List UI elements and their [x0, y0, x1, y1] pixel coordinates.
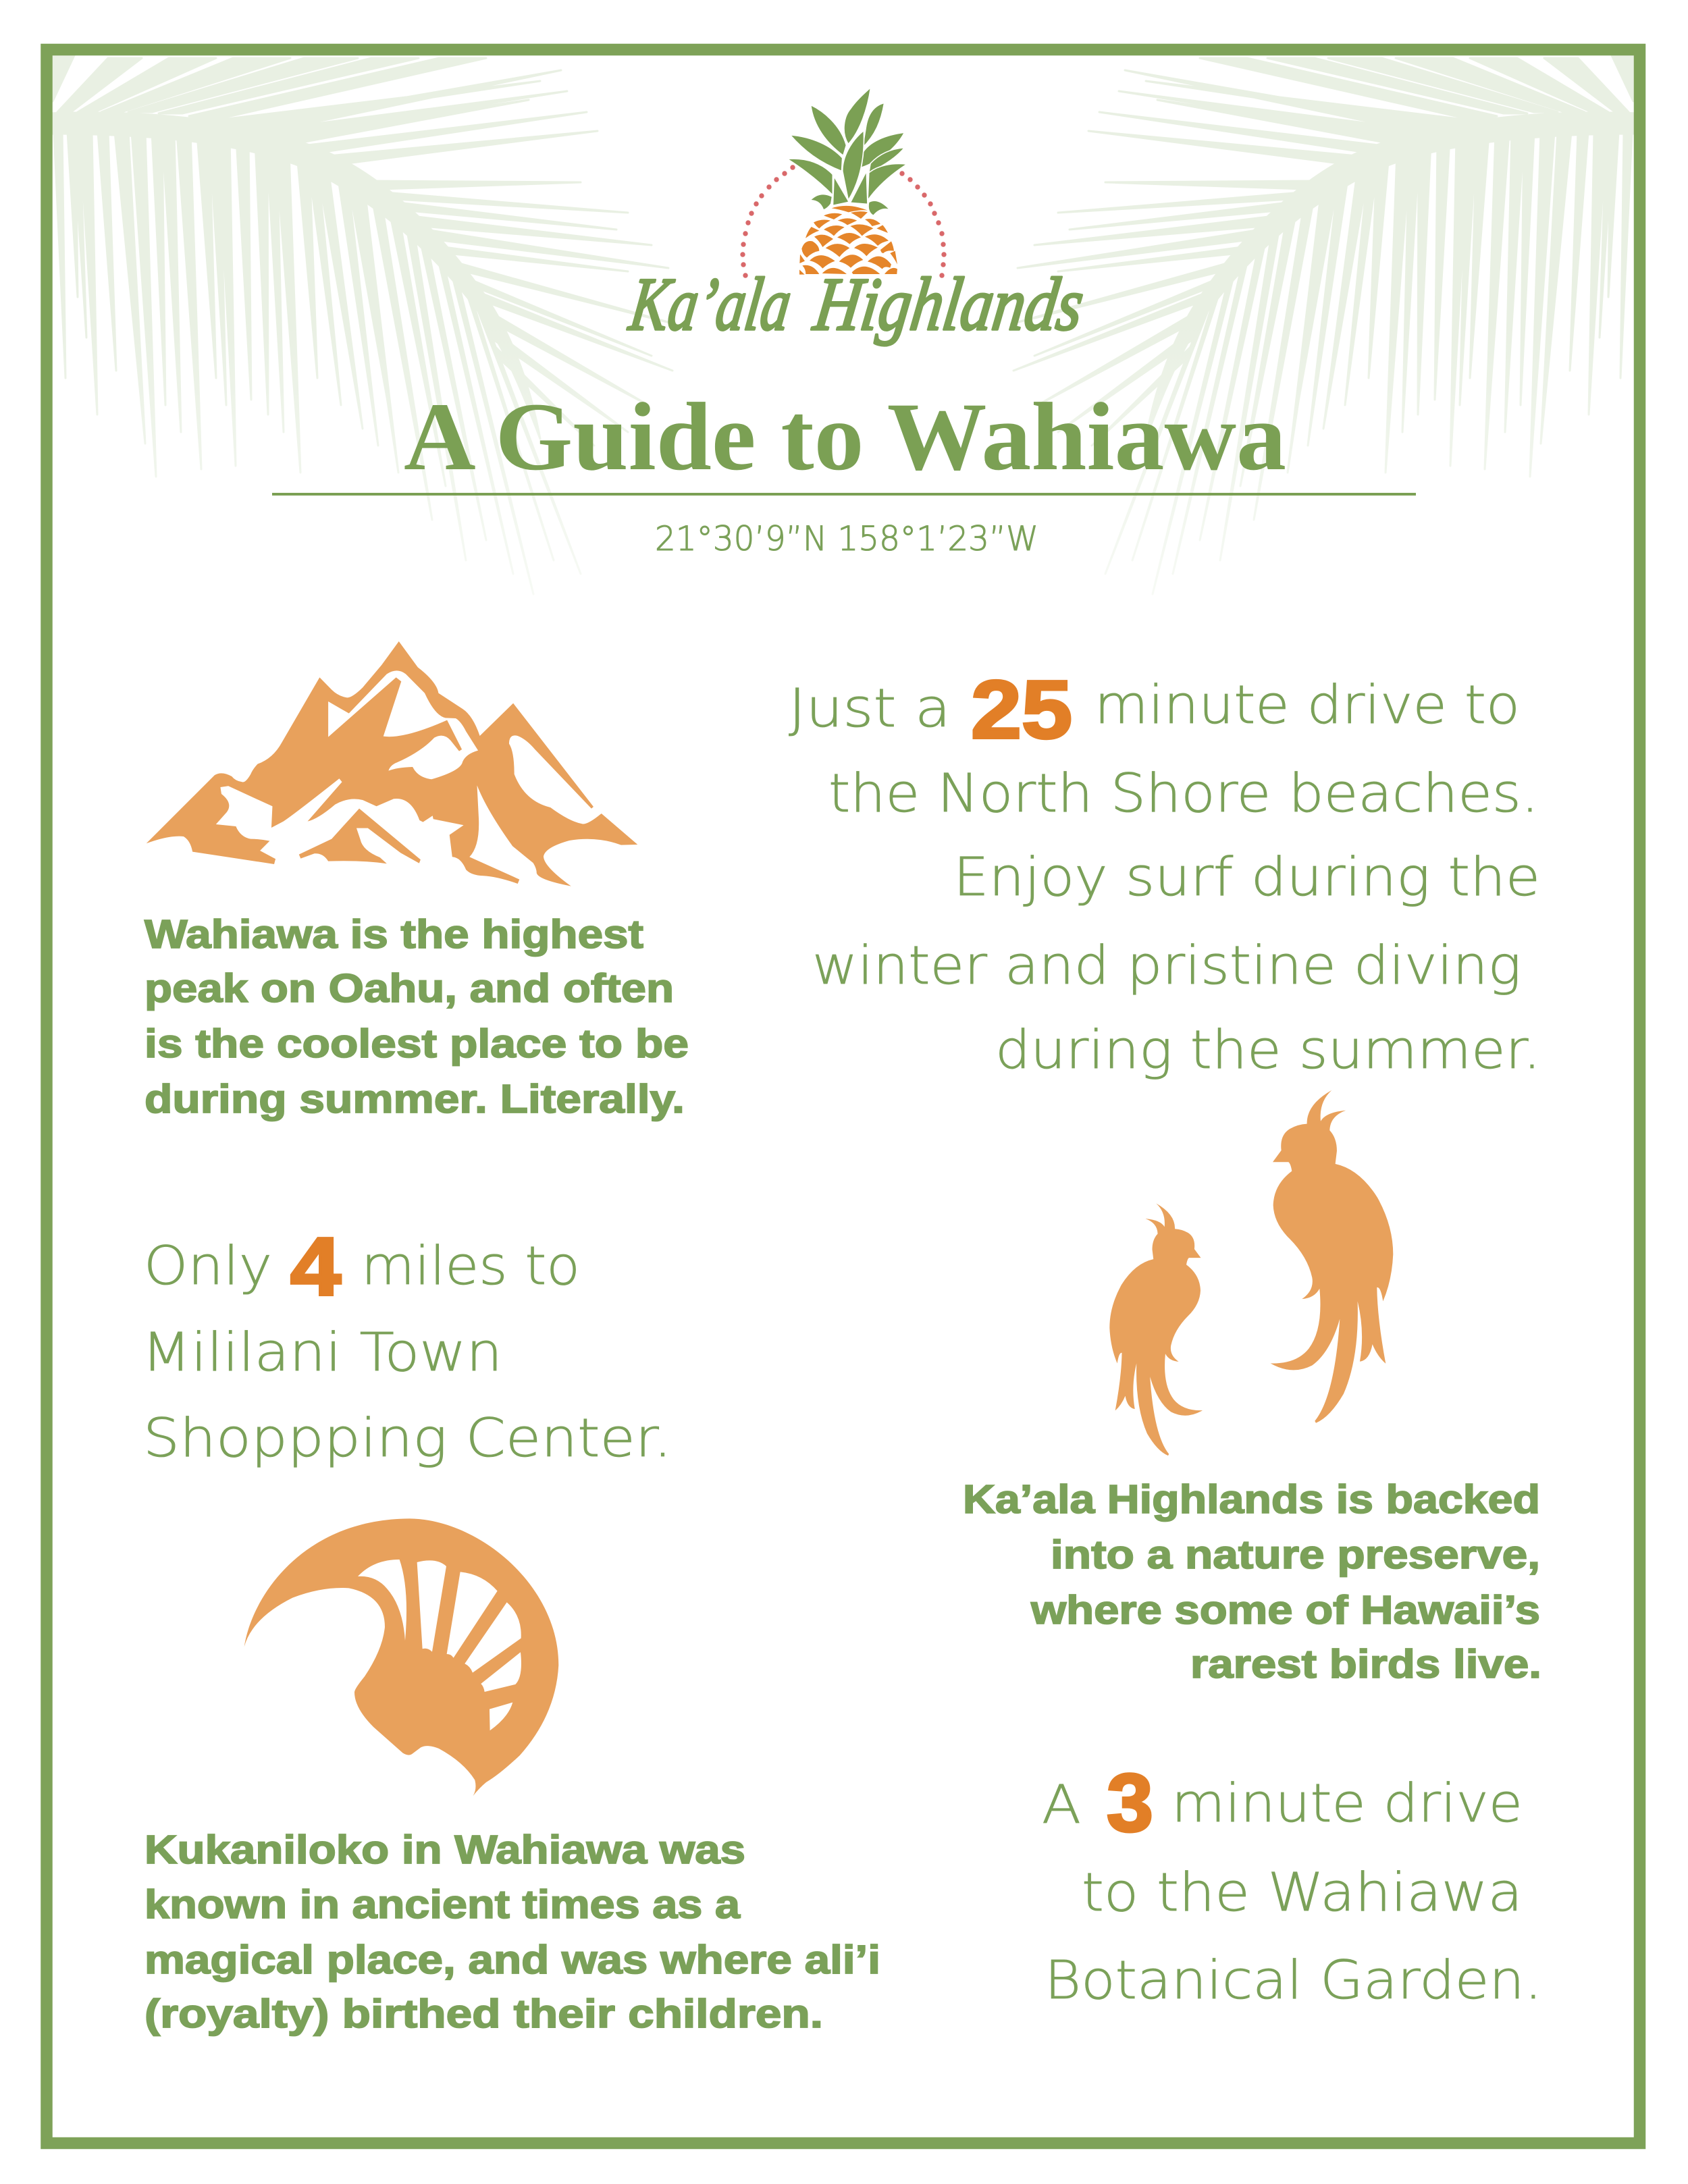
bird: right [1271, 1090, 1393, 1423]
callout: 25 minute drive: winter and pristine diving [812, 936, 1521, 996]
coordinates: 21°30’9”N 158°1’23”W [655, 519, 1038, 558]
text block: nature preserve: Ka’ala Highlands is backed [963, 1477, 1540, 1522]
bird: left [1109, 1203, 1203, 1456]
callout: 3 minute drive [1042, 1757, 1542, 2011]
callout: 3 minute drive: 3 [1107, 1757, 1153, 1848]
text block: Kukaniloko [144, 1828, 880, 2036]
icon: Kukaniloko helmet [244, 1518, 558, 1796]
script name: Highlands [808, 263, 1088, 346]
logo: pineapple with dotted arc and script name [624, 87, 1088, 346]
pineapple scales [799, 206, 897, 275]
text block: highest peak: is the coolest place to be [144, 1021, 689, 1066]
text block: nature preserve: rarest birds live. [1190, 1642, 1541, 1686]
callout: 4 miles: Mililani Town [142, 1323, 502, 1383]
callout: 25 minute drive: 25 [971, 664, 1072, 755]
text block: nature preserve: into a nature preserve, [1051, 1533, 1540, 1577]
callout: 25 minute drive: minute drive to [1094, 675, 1520, 736]
text block: Kukaniloko: known in ancient times as a [144, 1882, 741, 1927]
text block: Kukaniloko: (royalty) birthed their children. [144, 1992, 823, 2036]
callout: 25 minute drive: Just a [789, 678, 951, 739]
callout: 4 miles: Shoppping Center. [143, 1408, 672, 1469]
callout: 25 minute drive: the North Shore beaches. [828, 764, 1539, 824]
text block: highest peak: peak on Oahu, and often [144, 966, 674, 1011]
palm frond: top left [47, 55, 675, 594]
pineapple leaves [787, 87, 907, 205]
script name [624, 263, 1088, 346]
text block: highest peak [144, 912, 689, 1121]
callout: 4 miles: 4 [290, 1221, 341, 1312]
icon: two birds [1109, 1090, 1393, 1456]
text block: highest peak: during summer. Literally. [144, 1077, 685, 1121]
text block: nature preserve: where some of Hawaii’s [1030, 1588, 1540, 1632]
callout: 4 miles: Only [144, 1236, 272, 1297]
icon: mountain [147, 641, 637, 886]
text block: Kukaniloko: magical place, and was where ali’i [144, 1938, 880, 1982]
pineapple curled leaves [812, 194, 889, 215]
callout: 3 minute drive: Botanical Garden. [1045, 1950, 1542, 2011]
text block: highest peak: Wahiawa is the highest [144, 912, 643, 957]
callout: 4 miles: miles to [361, 1236, 580, 1297]
title: A Guide to Wahiawa [404, 383, 1286, 491]
palm frond: top right [1011, 55, 1639, 594]
dotted arc [740, 165, 947, 278]
callout: 3 minute drive: A [1042, 1775, 1081, 1836]
title rule [272, 493, 1416, 496]
text block: Kukaniloko: Kukaniloko in Wahiawa was [144, 1828, 745, 1872]
callout: 3 minute drive: minute drive [1171, 1774, 1523, 1834]
callout: 4 miles [142, 1221, 672, 1469]
text block: nature preserve [963, 1477, 1541, 1686]
pineapple body [799, 194, 897, 275]
callout: 25 minute drive: during the summer. [995, 1020, 1541, 1081]
callout: 25 minute drive [789, 664, 1541, 1081]
callout: 3 minute drive: to the Wahiawa [1082, 1863, 1523, 1923]
callout: 25 minute drive: Enjoy surf during the [953, 847, 1540, 908]
script name: Ka’ala [624, 263, 796, 346]
